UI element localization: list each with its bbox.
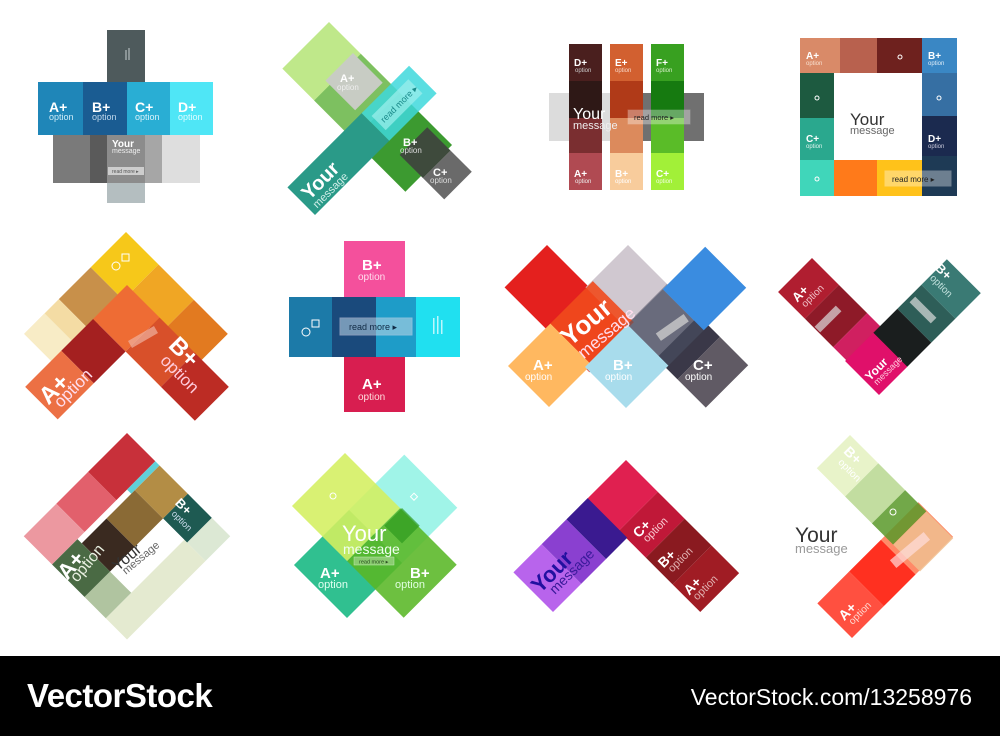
item 1: blue cross layout: C+ <box>135 99 153 115</box>
item 11: purple/crimson chevron: option <box>666 545 696 575</box>
item 7: multicolour X: Your <box>555 292 618 352</box>
item 7: multicolour X: option <box>525 372 552 383</box>
item 11: purple/crimson chevron: B+ <box>654 546 679 571</box>
item 2: green X layout: B+ <box>403 137 417 149</box>
item 6: pink/blue cross: read more ▸ <box>349 322 398 332</box>
item 10: green overlapping diamonds: Your <box>342 521 386 546</box>
item 11: purple/crimson chevron: C+ <box>629 516 654 541</box>
item 2: green X layout: C+ <box>433 167 447 179</box>
item 4: square frame layout: option <box>928 61 944 67</box>
item 12: right arrow chevron: A+ <box>835 599 859 623</box>
item 8: V checkmark <box>778 258 981 395</box>
item 11: purple/crimson chevron: A+ <box>680 574 704 598</box>
item 9: diamond frame <box>24 433 230 639</box>
item 2: green X layout: Your <box>297 158 344 204</box>
item 1: blue cross layout: D+ <box>178 99 196 115</box>
item 1: blue cross layout: option <box>178 112 203 122</box>
item 6: pink/blue cross: option <box>358 392 385 403</box>
item 2: green X layout: option <box>430 176 452 185</box>
item 11: purple/crimson chevron <box>513 460 739 612</box>
item 6: pink/blue cross <box>289 241 460 412</box>
item 6: pink/blue cross: option <box>358 272 385 283</box>
item 12: right arrow chevron: option <box>847 600 874 627</box>
item 3: vertical columns layout: option <box>656 179 672 185</box>
item 3: vertical columns layout: B+ <box>615 169 628 180</box>
item 3: vertical columns layout: option <box>575 68 591 74</box>
item 2: green X layout: read more ▸ <box>379 83 420 124</box>
item 7: multicolour X: option <box>605 372 632 383</box>
item 3: vertical columns layout: E+ <box>615 58 628 69</box>
item 4: square frame layout: option <box>928 144 944 150</box>
item 10: green overlapping diamonds: A+ <box>320 565 340 582</box>
item 11: purple/crimson chevron: Your <box>526 545 578 598</box>
item 4: square frame layout: read more ▸ <box>892 175 935 184</box>
item 4: square frame layout: option <box>806 61 822 67</box>
item 10: green overlapping diamonds: B+ <box>410 565 430 582</box>
item 9: diamond frame: message <box>120 539 162 577</box>
item 1: blue cross layout <box>38 30 213 203</box>
item 7: multicolour X: C+ <box>693 357 713 374</box>
item 4: square frame layout: Your <box>850 110 885 129</box>
item 8: V checkmark: option <box>800 283 827 310</box>
item 10: green overlapping diamonds: option <box>318 579 348 591</box>
footer url text: VectorStock.com/13258976 <box>691 684 972 710</box>
item 1: blue cross layout: B+ <box>92 99 110 115</box>
item 5: warm chevron up: option <box>157 351 203 397</box>
item 8: V checkmark: message <box>872 354 904 387</box>
item 5: warm chevron up: B+ <box>163 332 204 373</box>
item 3: vertical columns layout: message <box>573 120 618 132</box>
item 10: green overlapping diamonds <box>292 453 457 618</box>
item 2: green X layout: option <box>337 83 359 92</box>
item 10: green overlapping diamonds: option <box>395 579 425 591</box>
item 8: V checkmark: Your <box>862 355 891 383</box>
item 1: blue cross layout: option <box>49 112 74 122</box>
item 3: vertical columns layout: A+ <box>574 169 587 180</box>
item 12: right arrow chevron <box>795 435 953 638</box>
item 3: vertical columns layout: option <box>575 179 591 185</box>
item 3: vertical columns layout: option <box>656 68 672 74</box>
item 2: green X layout <box>282 22 472 215</box>
item 1: blue cross layout: Your <box>112 139 134 150</box>
item 8: V checkmark: A+ <box>789 282 812 305</box>
item 9: diamond frame: A+ <box>52 546 90 584</box>
item 5: warm chevron up <box>24 232 229 489</box>
item 6: pink/blue cross: A+ <box>362 376 382 393</box>
item 4: square frame layout: B+ <box>928 51 941 62</box>
item 11: purple/crimson chevron: option <box>641 515 671 545</box>
footer bar <box>0 656 1000 736</box>
item 3: vertical columns layout: F+ <box>656 58 668 69</box>
item 10: green overlapping diamonds: read more ▸ <box>359 560 389 566</box>
item 7: multicolour X <box>505 245 748 408</box>
item 7: multicolour X: B+ <box>613 357 633 374</box>
item 4: square frame layout: D+ <box>928 134 941 145</box>
item 1: blue cross layout: option <box>92 112 117 122</box>
item 3: vertical columns layout <box>549 44 704 190</box>
item 4: square frame layout: C+ <box>806 134 819 145</box>
item 4: square frame layout <box>800 38 957 196</box>
item 7: multicolour X: option <box>685 372 712 383</box>
item 4: square frame layout: A+ <box>806 51 819 62</box>
item 11: purple/crimson chevron: message <box>546 545 597 597</box>
item 7: multicolour X: A+ <box>533 357 553 374</box>
item 9: diamond frame: B+ <box>172 495 195 518</box>
item 8: V checkmark: option <box>927 273 954 300</box>
item 1: blue cross layout: read more ▸ <box>112 169 139 175</box>
item 5: warm chevron up: A+ <box>34 369 75 410</box>
item 9: diamond frame: option <box>67 541 108 586</box>
item 9: diamond frame: Your <box>109 541 146 575</box>
item 3: vertical columns layout: option <box>615 179 631 185</box>
item 12: right arrow chevron: Your <box>795 524 837 547</box>
item 11: purple/crimson chevron: option <box>691 573 721 603</box>
item 8: V checkmark: B+ <box>932 260 955 283</box>
item 3: vertical columns layout: option <box>615 68 631 74</box>
item 9: diamond frame: option <box>170 509 194 533</box>
item 2: green X layout: option <box>400 146 422 155</box>
item 7: multicolour X: message <box>574 304 639 362</box>
item 4: square frame layout: message <box>850 125 895 137</box>
item 12: right arrow chevron: B+ <box>841 443 865 467</box>
item 3: vertical columns layout: D+ <box>574 58 587 69</box>
item 6: pink/blue cross: B+ <box>362 257 382 274</box>
item 10: green overlapping diamonds: message <box>343 541 400 557</box>
item 3: vertical columns layout: read more ▸ <box>634 113 674 122</box>
item 4: square frame layout: option <box>806 144 822 150</box>
item 12: right arrow chevron: option <box>836 457 863 484</box>
item 2: green X layout: A+ <box>340 73 354 85</box>
item 1: blue cross layout: option <box>135 112 160 122</box>
item 5: warm chevron up: option <box>50 365 96 411</box>
footer logo text: VectorStock <box>27 677 213 714</box>
item 3: vertical columns layout: Your <box>573 106 606 123</box>
item 12: right arrow chevron: message <box>795 541 848 556</box>
item 1: blue cross layout: A+ <box>49 99 67 115</box>
item 1: blue cross layout: message <box>112 148 141 155</box>
item 2: green X layout: message <box>311 171 351 211</box>
item 3: vertical columns layout: C+ <box>656 169 669 180</box>
